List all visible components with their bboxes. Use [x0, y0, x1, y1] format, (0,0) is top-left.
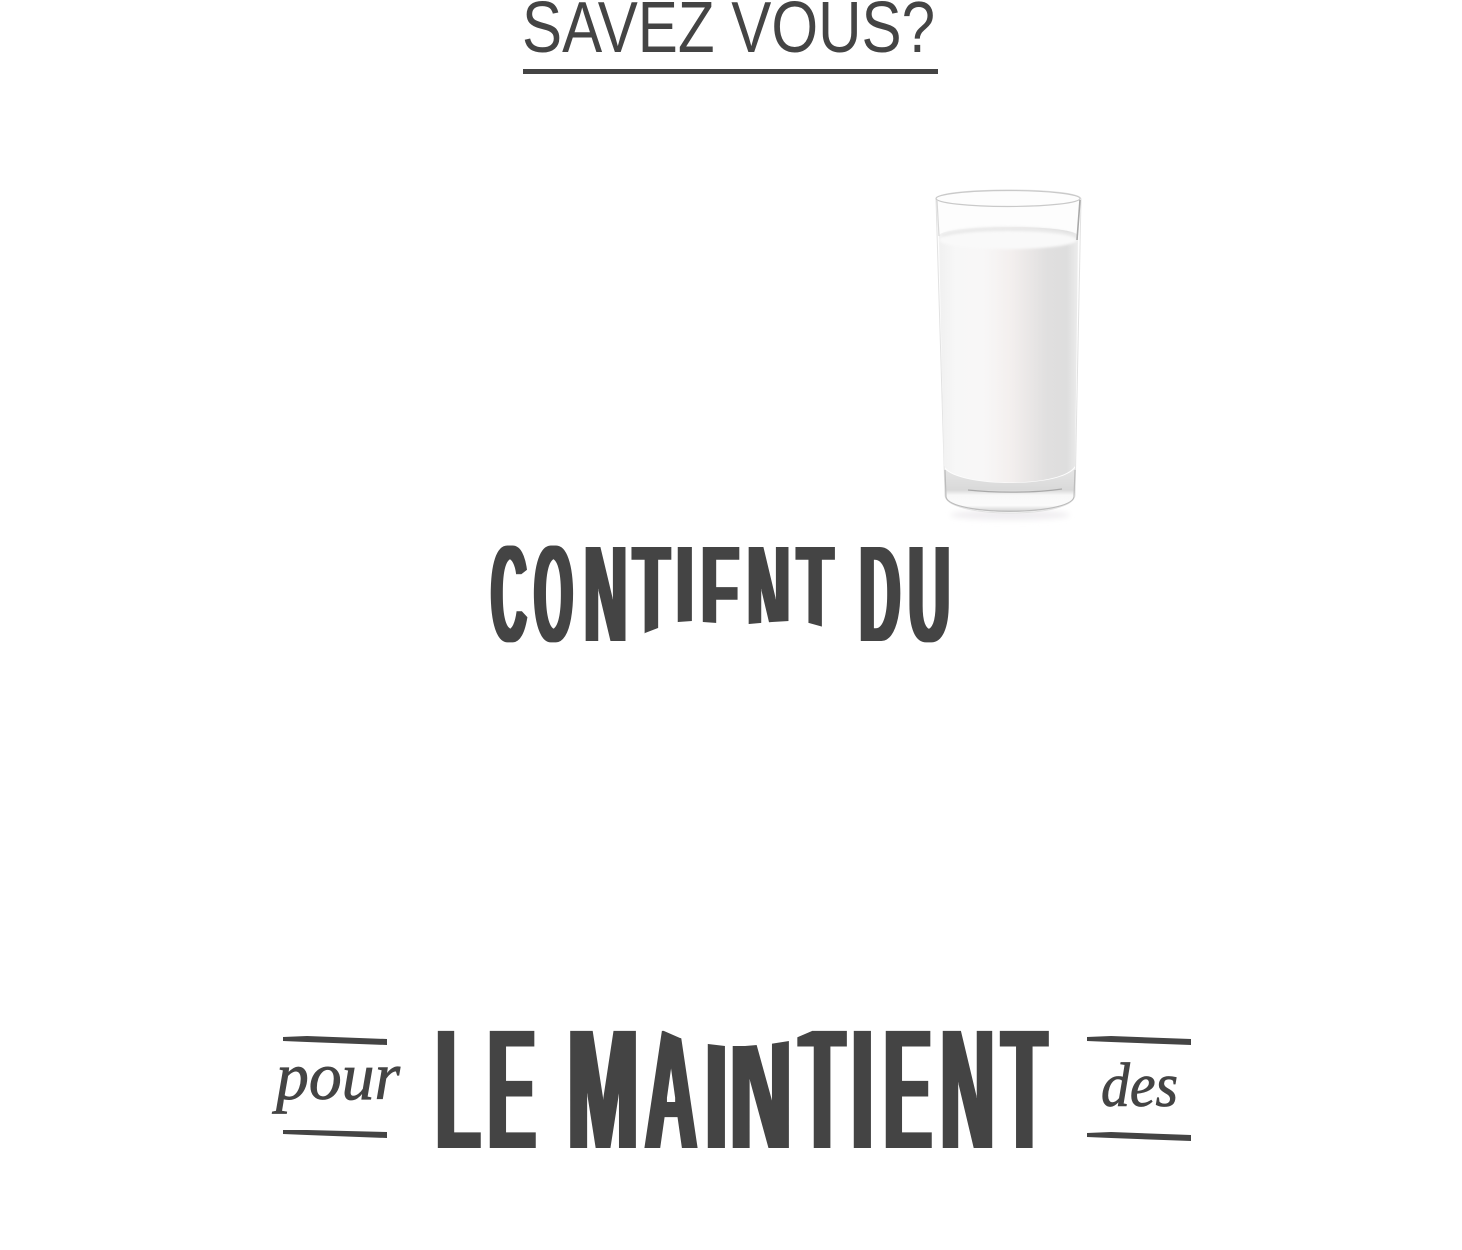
- heading: contient du: U: [908, 515, 950, 673]
- base outline: [945, 470, 1075, 511]
- heading: contient du: E: [701, 514, 740, 673]
- heading: contient du: C: [491, 516, 527, 673]
- heading: le maintient: N: [941, 991, 994, 1188]
- heading: le maintient: N: [730, 992, 792, 1188]
- heading: le maintient: T: [800, 991, 845, 1188]
- heading: contient du: D: [860, 515, 900, 673]
- heading: contient du: I: [676, 516, 694, 673]
- heading: contient du: O: [534, 516, 573, 673]
- milk: [939, 227, 1078, 482]
- heading: le maintient: E: [884, 991, 932, 1188]
- script word: pour: [272, 1038, 401, 1114]
- bottom rule: [283, 1130, 387, 1138]
- icon: glass of milk: [936, 190, 1081, 520]
- glass rim: [936, 190, 1080, 206]
- side label: des: [1087, 1036, 1191, 1141]
- heading: le maintient: E: [488, 991, 536, 1188]
- heading: le maintient: L: [436, 992, 480, 1188]
- glass base: [944, 468, 1075, 512]
- side label: pour: [272, 1036, 401, 1138]
- glass left edge: [937, 200, 939, 236]
- bottom rule: [1087, 1132, 1191, 1141]
- heading: contient du: N: [747, 515, 790, 672]
- glass right edge: [1077, 200, 1080, 240]
- heading: le maintient: M: [568, 992, 639, 1188]
- heading: le maintient: T: [1002, 991, 1047, 1188]
- heading: le maintient: I: [706, 991, 727, 1188]
- heading: contient du: T: [797, 514, 833, 673]
- milk surface: [939, 231, 1077, 249]
- title underline: [523, 69, 938, 74]
- milk surface back: [942, 227, 1074, 245]
- heading: le maintient: [438, 1030, 1049, 1148]
- base inner line: [968, 489, 1062, 492]
- glass shadow: [950, 510, 1070, 520]
- title: savez vous: [522, 0, 938, 74]
- heading: le maintient: I: [852, 991, 873, 1188]
- top rule: [1087, 1036, 1191, 1045]
- heading: contient du: N: [584, 515, 627, 672]
- script word: des: [1101, 1052, 1178, 1120]
- heading: contient du: T: [633, 515, 669, 672]
- heading: contient du: [490, 546, 949, 642]
- top rule: [283, 1036, 387, 1045]
- glass body: [936, 190, 1081, 513]
- heading: le maintient: A: [645, 990, 697, 1188]
